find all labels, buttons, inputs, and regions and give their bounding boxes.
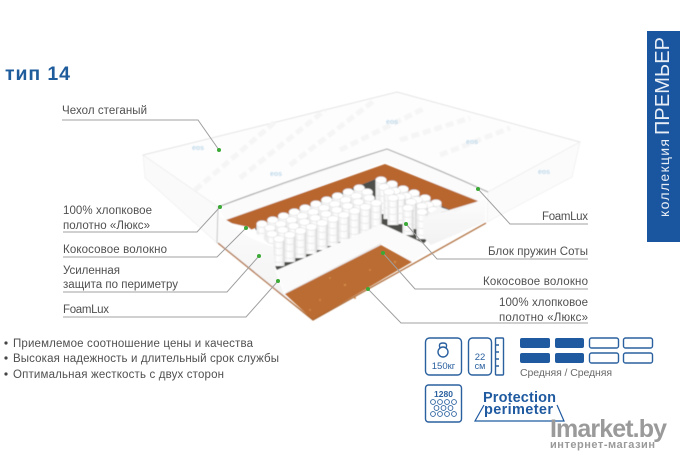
- left perimeter block: [218, 215, 296, 307]
- callout: quilted cover: [62, 105, 221, 152]
- left side face: [143, 155, 218, 243]
- icon: height 22 cm: 22: [475, 352, 485, 363]
- callout: cotton fabric right: [366, 287, 588, 324]
- callout: spring block: Блок пружин Соты: [488, 246, 588, 258]
- collection name: коллекция: [656, 139, 672, 217]
- brand marks: eos: [386, 119, 398, 126]
- seam: [217, 208, 218, 243]
- callout: perimeter protection: защита по периметру: [63, 279, 178, 291]
- callout: cotton fabric left: [63, 205, 222, 232]
- brand marks: [192, 119, 550, 178]
- feature list: Приемлемое соотношение цены и качества: [13, 338, 254, 350]
- quilted top surface: [143, 92, 580, 207]
- badge: protection perimeter: perimeter: [484, 402, 553, 418]
- icon: height 22 cm: см: [475, 361, 485, 371]
- feature list: Высокая надежность и длительный срок службы: [13, 353, 279, 365]
- badge: protection perimeter: [475, 390, 564, 421]
- fibre edge: [218, 223, 486, 320]
- brand marks: eos: [466, 139, 478, 146]
- reinforced perimeter foam: [277, 224, 430, 293]
- callout: cotton fabric left: полотно «Люкс»: [63, 220, 150, 232]
- callout: spring block: [404, 222, 588, 259]
- callout: cotton fabric right: полотно «Люкс»: [499, 312, 588, 324]
- collection title: ПРЕМЬЕР: [652, 37, 674, 135]
- callout: FoamLux right: FoamLux: [542, 211, 588, 223]
- spring block: [256, 177, 442, 266]
- callout: FoamLux left: [63, 279, 280, 317]
- callout: perimeter protection: Усиленная: [63, 265, 120, 277]
- right side face: [487, 142, 580, 222]
- callout: coconut fibre left: [63, 226, 248, 257]
- callout: FoamLux right: [476, 187, 588, 224]
- firmness bars: [520, 338, 652, 379]
- icon: 1280 springs: [426, 385, 462, 422]
- callout: perimeter protection: [63, 254, 261, 292]
- spring pit: [255, 178, 455, 270]
- title: тип 14: [5, 63, 70, 85]
- callout: coconut fibre right: [381, 251, 588, 289]
- lower coconut fibre: [285, 245, 412, 320]
- icon: max weight 150 kg: 150кг: [432, 361, 456, 372]
- callout: FoamLux left: FoamLux: [63, 304, 109, 316]
- callout: coconut fibre right: Кокосовое волокно: [483, 276, 588, 288]
- callout: cotton fabric right: 100% хлопковое: [499, 297, 588, 309]
- upper coconut fibre: [226, 164, 478, 232]
- upper foam layer: [218, 149, 488, 221]
- callout: quilted cover: Чехол стеганый: [62, 105, 147, 117]
- watermark: интернет-магазин: [550, 439, 655, 451]
- right perimeter block: [423, 199, 486, 245]
- callout: cotton fabric left: 100% хлопковое: [63, 205, 152, 217]
- coir speckles: [309, 261, 396, 311]
- panel: collection tab: [647, 31, 680, 242]
- brand marks: eos: [538, 169, 550, 176]
- icon: 1280 springs: 1280: [434, 389, 453, 399]
- watermark: Imarket.by: [550, 415, 667, 443]
- firmness label: Средняя / Средняя: [520, 367, 612, 379]
- badge: protection perimeter: Protection: [483, 390, 556, 406]
- feature list: [4, 338, 279, 381]
- feature list: Оптимальная жесткость с двух сторон: [13, 369, 224, 381]
- brand marks: eos: [192, 145, 204, 152]
- icon: max weight 150 kg: [426, 338, 462, 375]
- callout: coconut fibre left: Кокосовое волокно: [63, 244, 167, 256]
- brand marks: eos: [270, 171, 282, 178]
- icon: height 22 cm: [468, 338, 504, 375]
- mattress cross-section illustration: [143, 92, 580, 320]
